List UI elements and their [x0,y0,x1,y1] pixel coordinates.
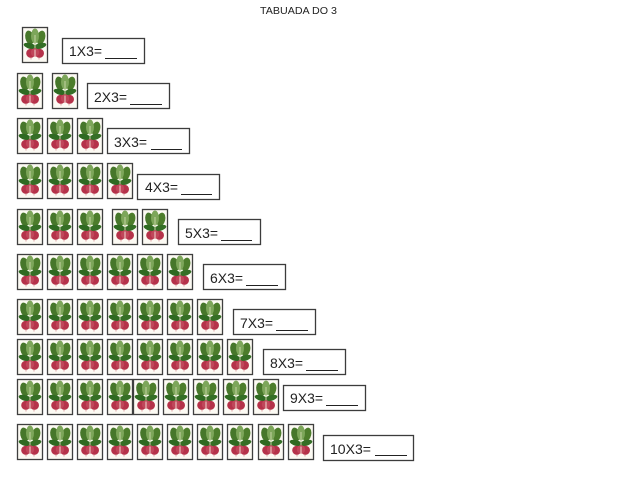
answer box: 9X3 [284,386,366,410]
answer box: 7X3 [234,310,316,334]
answer box: 5X3 [178,220,260,244]
answer box: 1X3: 1X3= [69,43,102,59]
row: 8X3 [18,340,346,374]
row: 7X3 [18,300,316,334]
answer box: 2X3 [88,84,170,108]
answer box: 2X3: 2X3= [94,89,127,105]
icon: radish cards [18,300,222,334]
icon: radish cards [18,74,78,108]
row: 5X3 [18,210,260,244]
answer box: 4X3: 4X3= [145,179,178,195]
answer box: 3X3: 3X3= [114,134,147,150]
answer box: 6X3: 6X3= [210,270,243,286]
answer box: 6X3 [204,264,286,290]
icon: radish cards [18,254,192,290]
icon: radish cards [18,340,252,374]
row: 4X3 [18,164,220,200]
answer box: 10X3 [324,436,414,460]
icon: radish cards [18,164,132,198]
icon: radish card [22,28,48,62]
answer box: 4X3 [138,174,220,200]
title: TABUADA DO 3 [260,5,337,17]
row: 10X3 [18,424,414,460]
row: 9X3 [18,380,366,414]
answer box: 8X3 [264,350,346,374]
answer box: 5X3: 5X3= [185,225,218,241]
row: 2X3 [18,74,170,108]
row: 3X3 [18,118,190,154]
answer box: 3X3 [108,128,190,154]
row: 6X3 [18,254,286,290]
answer box: 7X3: 7X3= [240,315,273,331]
answer box: 9X3: 9X3= [290,390,323,406]
answer box: 8X3: 8X3= [270,355,303,371]
icon: radish cards [18,118,102,154]
icon: radish cards [18,424,314,460]
row: 1X3 [22,28,144,64]
icon: radish cards [18,380,278,414]
answer box: 10X3: 10X3= [330,441,371,457]
icon: radish cards [18,210,168,244]
